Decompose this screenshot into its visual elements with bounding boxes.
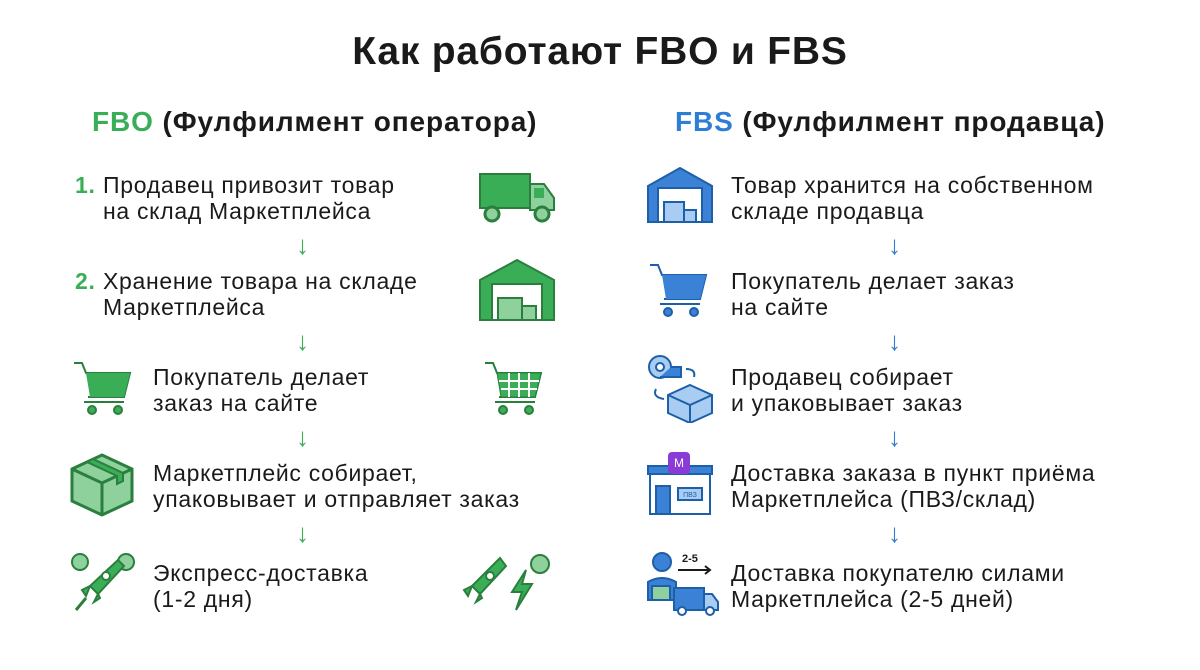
arrow: ↓ — [888, 518, 901, 548]
icon: cart grid — [485, 362, 542, 415]
arrow: ↓ — [296, 422, 309, 452]
panel: FBS steps — [647, 166, 1095, 616]
icon: tape and box — [648, 355, 713, 423]
step 4 text: Маркетплейса (ПВЗ/склад) — [731, 486, 1036, 512]
step 4 text: Доставка заказа в пункт приёма — [731, 460, 1095, 486]
icon: pickup point — [647, 452, 713, 515]
step 2 text: Покупатель делает заказ — [731, 268, 1015, 294]
icon: courier truck — [647, 552, 719, 616]
step 5 text: (1-2 дня) — [153, 586, 253, 612]
icon: box — [70, 453, 134, 517]
icon: courier truck: 2-5 — [682, 553, 698, 565]
icon: pickup point: ПВЗ — [683, 492, 697, 499]
step 4 text: Маркетплейс собирает, — [153, 460, 418, 486]
step 3 text — [731, 364, 963, 416]
arrow: ↓ — [888, 422, 901, 452]
step 1 text: Товар хранится на собственном — [731, 172, 1094, 198]
icon: blue cart — [650, 264, 708, 317]
step 1 text: Продавец привозит товар — [103, 172, 395, 198]
heading: FBS: FBS (Фулфилмент продавца) — [675, 106, 1105, 137]
icon: rocket clocks — [71, 553, 135, 611]
panel: FBO steps — [70, 172, 555, 612]
icon: blue warehouse — [647, 166, 713, 223]
step 3 text: Продавец собирает — [731, 364, 954, 390]
step 1 text — [731, 172, 1094, 224]
step 1 text: 1. — [75, 172, 96, 198]
step 3 text: заказ на сайте — [153, 390, 318, 416]
step 2 text: Хранение товара на складе — [103, 268, 418, 294]
step 5 text — [153, 560, 368, 612]
step 5 text — [731, 560, 1065, 612]
icon: rocket bolt — [462, 554, 550, 610]
step 3 text — [153, 364, 369, 416]
step 1 text — [75, 172, 395, 224]
step 1 text: на склад Маркетплейса — [103, 198, 371, 224]
arrow: ↓ — [296, 326, 309, 356]
step 3 text: и упаковывает заказ — [731, 390, 963, 416]
step 5 text: Доставка покупателю силами — [731, 560, 1065, 586]
step 5 text: Экспресс-доставка — [153, 560, 368, 586]
arrow: ↓ — [296, 518, 309, 548]
title: Как работают FBO и FBS — [352, 30, 848, 73]
step 2 text — [731, 268, 1015, 320]
step 2 text: на сайте — [731, 294, 829, 320]
arrow: ↓ — [296, 230, 309, 260]
step 2 text — [75, 268, 418, 320]
step 2 text: 2. — [75, 268, 96, 294]
icon: warehouse — [479, 258, 555, 321]
icon: cart — [74, 362, 132, 415]
step 5 text: Маркетплейса (2-5 дней) — [731, 586, 1014, 612]
step 3 text: Покупатель делает — [153, 364, 369, 390]
heading: FBO: FBO (Фулфилмент оператора) — [92, 106, 537, 137]
icon: truck — [479, 173, 555, 222]
step 4 text: упаковывает и отправляет заказ — [153, 486, 520, 512]
arrow: ↓ — [888, 230, 901, 260]
step 2 text: Маркетплейса — [103, 294, 265, 320]
icon: pickup point: M — [674, 456, 684, 470]
arrow: ↓ — [888, 326, 901, 356]
step 1 text: складе продавца — [731, 198, 924, 224]
step 4 text — [731, 460, 1095, 512]
step 4 text — [153, 460, 520, 512]
